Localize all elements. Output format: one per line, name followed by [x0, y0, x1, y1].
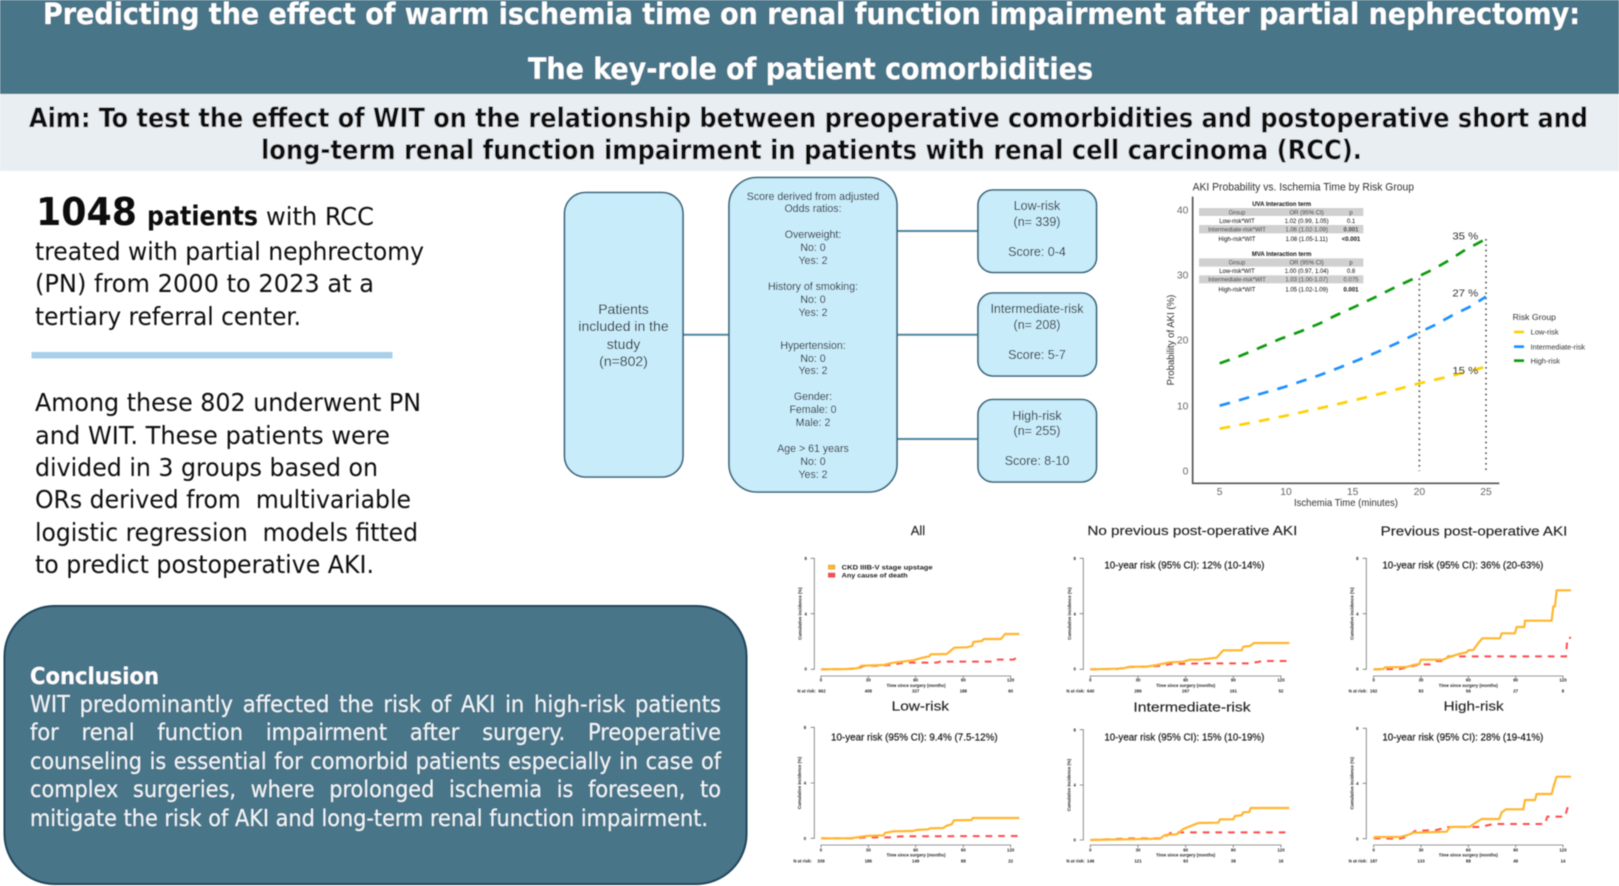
panel: KM plot, no previous post-operative AKI: N at risk: [1066, 689, 1085, 694]
panel: KM plot, no previous post-operative AKI: 120 [1277, 678, 1285, 683]
box: low-risk [978, 190, 1096, 272]
box: score derivation: Female: 0 [789, 404, 837, 416]
panel: KM plot, intermediate-risk: 93 [1183, 858, 1189, 863]
panel: KM plot, previous post-operative AKI: Time since surgery (months) [1439, 683, 1498, 688]
panel: KM plot, previous post-operative AKI: 162 [1370, 689, 1378, 694]
curve: high-risk [1220, 239, 1486, 363]
text block: groups: divided in 3 groups based on [35, 453, 378, 482]
risk annotation: 10-year risk (95% CI): 9.4% (7.5-12%) [831, 732, 998, 743]
panel: KM plot, All: 30 [866, 678, 871, 683]
header band with title [0, 0, 1619, 94]
aim line 2: long-term renal function impairment in patients with renal cell carcinoma (RCC). [261, 135, 1362, 166]
panel: KM plot, previous post-operative AKI: Previous post-operative AKI [1381, 524, 1567, 539]
table: UVA interaction term: Group [1229, 210, 1246, 216]
box: low-risk: (n= 339) [1014, 215, 1060, 229]
box: score derivation: No: 0 [800, 353, 826, 365]
conclusion text: counseling is essential for comorbid patients especially in case of [30, 749, 722, 775]
panel: KM plot, All: 0 [804, 667, 807, 672]
panel: KM plot, high-risk: 120 [1559, 847, 1567, 852]
table: MVA interaction term: Group [1229, 261, 1246, 267]
box: high-risk: (n= 255) [1014, 424, 1060, 438]
panel: KM plot, low-risk: 88 [961, 858, 966, 863]
panel: KM plot, no previous post-operative AKI: 30 [1136, 678, 1141, 683]
panel: KM plot, intermediate-risk: 4 [1073, 783, 1076, 788]
panel: KM plot, high-risk: 14 [1561, 858, 1566, 863]
end labels: 35 % [1452, 231, 1478, 242]
table: MVA interaction term: Intermediate-risk*WIT [1208, 277, 1266, 283]
panel: KM plot, All: 4 [804, 611, 807, 616]
box: score derivation: No: 0 [800, 456, 826, 468]
panel: KM plot, high-risk: 133 [1417, 858, 1425, 863]
end labels [1452, 231, 1478, 377]
panel: KM plot, no previous post-operative AKI: 267 [1182, 689, 1190, 694]
panel: KM plot, low-risk: 0 [820, 847, 823, 852]
flow diagram [564, 178, 1096, 492]
table: MVA interaction term [1199, 252, 1363, 294]
risk annotation: 10-year risk (95% CI): 36% (20-63%) [1382, 561, 1543, 572]
panel: KM plot, All: 60 [913, 678, 919, 683]
table: UVA interaction term: UVA Interaction term [1252, 202, 1311, 208]
panel: KM plot, high-risk: 4 [1356, 781, 1359, 786]
panel: KM plot, intermediate-risk: N at risk: [1066, 858, 1085, 863]
box: score derivation: Male: 2 [796, 417, 830, 429]
panel: KM plot, intermediate-risk: 60 [1183, 847, 1189, 852]
risk annotation: 10-year risk (95% CI): 28% (19-41%) [1382, 732, 1543, 743]
table: MVA interaction term: 0.075 [1344, 277, 1359, 283]
panel: KM plot, intermediate-risk: 121 [1134, 858, 1142, 863]
panel: KM plot, no previous post-operative AKI: 60 [1183, 678, 1189, 683]
panel: KM plot, previous post-operative AKI: 8 [1356, 556, 1359, 561]
legend: CKD IIIB-V stage upstage [842, 565, 933, 572]
panel: KM plot, no previous post-operative AKI: 640 [1087, 689, 1095, 694]
panel: KM plot, All: Cumulative incidence (%) [798, 587, 803, 640]
box: patients included: study [607, 336, 640, 352]
end labels: 27 % [1452, 289, 1478, 300]
panel: KM plot, intermediate-risk: 8 [1073, 727, 1076, 732]
panel: KM plot, high-risk: 0 [1372, 847, 1375, 852]
table: UVA interaction term: p [1349, 210, 1353, 216]
panel: KM plot, previous post-operative AKI: 83 [1419, 689, 1424, 694]
legend [1513, 312, 1586, 365]
box: low-risk: Score: 0-4 [1008, 245, 1066, 259]
table: UVA interaction term: <0.001 [1342, 237, 1361, 243]
table: MVA interaction term: MVA Interaction term [1252, 252, 1311, 258]
box: score derivation [729, 178, 897, 492]
text block: cohort: with RCC [266, 202, 374, 231]
panel: KM plot, high-risk: 49 [1513, 858, 1519, 863]
panel: KM plot, low-risk: 120 [1007, 847, 1015, 852]
risk annotation: 10-year risk (95% CI): 12% (10-14%) [1104, 561, 1264, 572]
table: MVA interaction term: High-risk*WIT [1219, 288, 1256, 294]
panel: KM plot, All: 8 [804, 556, 807, 561]
table: UVA interaction term: 1.08 (1.05-1.11) [1286, 237, 1328, 243]
legend: High-risk [1531, 358, 1561, 365]
panel: KM plot, previous post-operative AKI: N at risk: [1349, 689, 1368, 694]
panel: KM plot, intermediate-risk: 30 [1136, 847, 1141, 852]
legend: Intermediate-risk [1531, 344, 1586, 351]
line chart: AKI probability vs ischemia time: 15 [1347, 487, 1359, 498]
x axis title: Ischemia Time (minutes) [1294, 498, 1398, 509]
box: score derivation: Yes: 2 [798, 469, 828, 481]
line chart: AKI probability vs ischemia time [1166, 182, 1586, 509]
panel: KM plot, high-risk: 90 [1513, 847, 1519, 852]
text block: groups: ORs derived from multivariable [35, 485, 411, 514]
panel: KM plot, All: 120 [1007, 678, 1015, 683]
panel: KM plot, All: 662 [818, 689, 826, 694]
box: score derivation: Yes: 2 [798, 255, 828, 267]
panel: KM plot, previous post-operative AKI: 0 [1372, 678, 1375, 683]
panel: KM plot, All: 188 [960, 689, 968, 694]
curve: intermediate-risk [1220, 297, 1486, 406]
legend: Risk Group [1513, 312, 1556, 322]
box: high-risk: Score: 8-10 [1005, 454, 1069, 468]
panel: KM plot, previous post-operative AKI: 60 [1466, 678, 1471, 683]
panel: KM plot, no previous post-operative AKI: Cumulative incidence (%) [1067, 587, 1072, 640]
table: UVA interaction term: 0.001 [1344, 227, 1359, 233]
panel: KM plot, All: 90 [961, 678, 966, 683]
panel: KM plot, low-risk: 90 [961, 847, 966, 852]
panel: KM plot, intermediate-risk: 90 [1231, 847, 1236, 852]
panel: KM plot, intermediate-risk: Intermediate-risk [1133, 699, 1251, 714]
end labels: 15 % [1452, 366, 1478, 377]
text block: groups: to predict postoperative AKI. [35, 550, 374, 579]
panel: KM plot, low-risk [793, 699, 1019, 863]
panel: KM plot, no previous post-operative AKI: 0 [1073, 667, 1076, 672]
panel: KM plot, low-risk: 186 [865, 858, 873, 863]
conclusion text: for renal function impairment after surgery. Preoperative [30, 720, 721, 746]
box: high-risk: High-risk [1012, 409, 1062, 423]
panel: KM plot, All: Time since surgery (months) [886, 683, 946, 688]
table: UVA interaction term: Intermediate-risk*WIT [1208, 227, 1266, 233]
panel: conclusion [4, 606, 746, 884]
box: score derivation: Age > 61 years [777, 443, 849, 455]
panel: KM plot, previous post-operative AKI: 4 [1356, 611, 1359, 616]
panel: KM plot, previous post-operative AKI: 120 [1559, 678, 1567, 683]
table: UVA interaction term: Low-risk*WIT [1219, 219, 1255, 225]
text block: cohort: treated with partial nephrectomy [35, 237, 424, 266]
panel: KM plot, low-risk: 8 [804, 725, 807, 730]
text block: groups [35, 388, 421, 579]
panel: KM plot, high-risk: 88 [1466, 858, 1471, 863]
box: score derivation: Odds ratios: [784, 203, 842, 215]
panel: KM plot, high-risk: 30 [1419, 847, 1424, 852]
box: intermediate-risk: Intermediate-risk [990, 302, 1084, 316]
conclusion text: WIT predominantly affected the risk of AKI in high-risk patients [30, 692, 721, 718]
panel: KM plot, no previous post-operative AKI: 4 [1073, 611, 1076, 616]
box: score derivation: Gender: [794, 391, 832, 403]
y axis title: Probability of AKI (%) [1166, 295, 1177, 385]
panel: KM plot, intermediate-risk: Time since surgery (months) [1156, 852, 1216, 857]
text block: cohort: (PN) from 2000 to 2023 at a [35, 269, 374, 298]
panel: KM plot, previous post-operative AKI: 0 [1356, 667, 1359, 672]
line chart: AKI probability vs ischemia time: 20 [1177, 335, 1189, 346]
panel: KM plot, high-risk: 187 [1370, 858, 1378, 863]
panel: KM plot, previous post-operative AKI: 27 [1513, 689, 1519, 694]
panel: KM plot, All: 327 [912, 689, 920, 694]
line chart: AKI probability vs ischemia time: 20 [1414, 487, 1425, 498]
panel: KM plot, previous post-operative AKI: 30 [1419, 678, 1424, 683]
panel: KM plot, intermediate-risk: 38 [1231, 858, 1236, 863]
panel: KM plot, high-risk: 0 [1356, 836, 1359, 841]
box: intermediate-risk [978, 293, 1096, 376]
panel: KM plot, All: 0 [820, 678, 823, 683]
table: MVA interaction term: 0.8 [1347, 269, 1356, 275]
panel: KM plot, intermediate-risk: Cumulative incidence (%) [1066, 758, 1071, 811]
title line 2: The key-role of patient comorbidities [528, 52, 1093, 86]
text block: cohort: 1048 [36, 190, 137, 234]
panel: KM plot, previous post-operative AKI: Cumulative incidence (%) [1349, 587, 1354, 640]
risk annotation: 10-year risk (95% CI): 15% (10-19%) [1104, 732, 1264, 743]
panel: KM plot, high-risk: N at risk: [1349, 858, 1368, 863]
panel: KM plot, no previous post-operative AKI [1066, 523, 1297, 694]
aim band [0, 94, 1619, 171]
panel: KM plot, high-risk: 60 [1466, 847, 1471, 852]
text block: cohort: tertiary referral center. [35, 302, 301, 331]
panel: KM plot, high-risk: High-risk [1444, 699, 1504, 714]
panel: KM plot, low-risk: 0 [804, 836, 807, 841]
box: patients included: (n=802) [599, 353, 648, 369]
conclusion heading: Conclusion [30, 664, 159, 690]
text block: cohort [35, 190, 424, 331]
box: low-risk: Low-risk [1014, 199, 1061, 213]
table: UVA interaction term: 0.1 [1347, 219, 1356, 225]
line chart: AKI probability vs ischemia time: 25 [1480, 487, 1492, 498]
box: intermediate-risk: Score: 5-7 [1008, 348, 1066, 362]
legend: Low-risk [1531, 330, 1559, 337]
panel: KM plot, no previous post-operative AKI: No previous post-operative AKI [1087, 523, 1297, 538]
text block: groups: Among these 802 underwent PN [35, 388, 421, 417]
line chart: AKI probability vs ischemia time: 0 [1183, 467, 1189, 478]
panel: KM plot, low-risk: 60 [913, 847, 919, 852]
curve: low-risk [1220, 367, 1486, 429]
table: MVA interaction term: 0.001 [1344, 288, 1359, 294]
conclusion text: mitigate the risk of AKI and long-term renal function impairment. [30, 806, 708, 832]
box: score derivation: No: 0 [800, 294, 826, 306]
conclusion text: complex surgeries, where prolonged ischemia is foreseen, to [30, 777, 721, 803]
panel: KM plot, low-risk: N at risk: [793, 858, 812, 863]
table: UVA interaction term: 1.06 (1.02-1.09) [1285, 227, 1328, 233]
line chart: AKI probability vs ischemia time: 30 [1177, 270, 1189, 281]
panel: KM plot, low-risk: 22 [1008, 858, 1014, 863]
box: intermediate-risk: (n= 208) [1014, 318, 1060, 332]
panel: KM plot, low-risk: Low-risk [892, 699, 950, 714]
panel: KM plot, All: All [911, 523, 925, 538]
panel: KM plot, All: N at risk: [797, 689, 816, 694]
chart title: AKI Probability vs. Ischemia Time by Risk Group [1193, 182, 1414, 194]
box: score derivation: Hypertension: [780, 340, 846, 352]
box: score derivation: History of smoking: [768, 281, 858, 293]
table: UVA interaction term [1199, 202, 1363, 243]
text block: groups: logistic regression models fitted [35, 518, 418, 547]
text block: cohort: patients [147, 201, 258, 232]
table: MVA interaction term: 1.03 (1.00-1.07) [1285, 277, 1328, 283]
panel: KM plot, no previous post-operative AKI: 286 [1134, 689, 1142, 694]
legend [828, 565, 933, 580]
conclusion text [30, 692, 722, 832]
line chart: AKI probability vs ischemia time: 10 [1280, 487, 1292, 498]
legend: Any cause of death [842, 573, 908, 580]
panel: KM plot, low-risk: 149 [912, 858, 920, 863]
box: patients included: Patients [598, 301, 649, 317]
panel: KM plot, no previous post-operative AKI: 90 [1231, 678, 1236, 683]
panel: KM plot, previous post-operative AKI [1349, 524, 1571, 694]
box: score derivation: Yes: 2 [798, 365, 828, 377]
box: score derivation: Overweight: [785, 229, 841, 241]
panel: KM plot, intermediate-risk: 120 [1277, 847, 1285, 852]
panel: KM plot, intermediate-risk: 146 [1087, 858, 1095, 863]
box: score derivation: Score derived from adjusted [747, 191, 879, 203]
table: UVA interaction term: OR (95% CI) [1290, 210, 1324, 216]
table: UVA interaction term: 1.02 (0.99, 1.05) [1285, 219, 1329, 225]
panel: KM plot, no previous post-operative AKI: 0 [1089, 678, 1092, 683]
aim line 1: Aim: To test the effect of WIT on the relationship between preoperative comorbidities and postoperative short and [29, 103, 1588, 134]
panel: KM plot, high-risk: Time since surgery (months) [1439, 852, 1498, 857]
panel: KM plot, no previous post-operative AKI: 8 [1073, 556, 1076, 561]
panel: KM plot, All: 408 [865, 689, 873, 694]
panel: KM plot, previous post-operative AKI: 90 [1513, 678, 1519, 683]
box: high-risk [978, 400, 1096, 482]
table: MVA interaction term: 1.00 (0.97, 1.04) [1285, 269, 1329, 275]
panel: KM plot, intermediate-risk: 16 [1279, 858, 1284, 863]
panel: KM plot, low-risk: Cumulative incidence (%) [797, 756, 802, 809]
panel: KM plot, low-risk: 339 [817, 858, 825, 863]
panel: KM plot, high-risk: 8 [1356, 726, 1359, 731]
panel: KM plot, All: 60 [1008, 689, 1014, 694]
table: UVA interaction term: High-risk*WIT [1219, 237, 1256, 243]
table: MVA interaction term: OR (95% CI) [1290, 261, 1324, 267]
box: score derivation: Yes: 2 [798, 307, 828, 319]
panel: KM plot, intermediate-risk: 0 [1073, 838, 1076, 843]
line chart: AKI probability vs ischemia time: 40 [1177, 205, 1189, 216]
line chart: AKI probability vs ischemia time: 10 [1177, 401, 1189, 412]
panel: KM plot, intermediate-risk: 0 [1089, 847, 1092, 852]
panel: KM plot, previous post-operative AKI: 8 [1562, 689, 1565, 694]
table: MVA interaction term: p [1349, 261, 1353, 267]
panel: KM plot, low-risk: 30 [866, 847, 871, 852]
box: score derivation: No: 0 [800, 242, 826, 254]
box: patients included [564, 192, 683, 477]
panel: KM plot, high-risk: Cumulative incidence (%) [1349, 757, 1354, 810]
panel: KM plot, no previous post-operative AKI: 52 [1279, 689, 1284, 694]
table: MVA interaction term: 1.05 (1.02-1.09) [1285, 288, 1328, 294]
panel: KM plot, high-risk [1349, 699, 1571, 863]
panel: KM plot, low-risk: 4 [804, 781, 807, 786]
text block: groups: and WIT. These patients were [35, 421, 390, 450]
panel: KM plot, All [797, 523, 1019, 694]
panel: KM plot, low-risk: Time since surgery (months) [886, 852, 946, 857]
line chart: AKI probability vs ischemia time: 5 [1217, 487, 1223, 498]
panel: KM plot, intermediate-risk [1066, 699, 1289, 863]
panel: KM plot, previous post-operative AKI: 56 [1466, 689, 1471, 694]
table: MVA interaction term: Low-risk*WIT [1219, 269, 1255, 275]
panel: KM plot, no previous post-operative AKI: 161 [1230, 689, 1238, 694]
panel: KM plot, no previous post-operative AKI: Time since surgery (months) [1156, 683, 1216, 688]
box: patients included: included in the [578, 318, 669, 334]
